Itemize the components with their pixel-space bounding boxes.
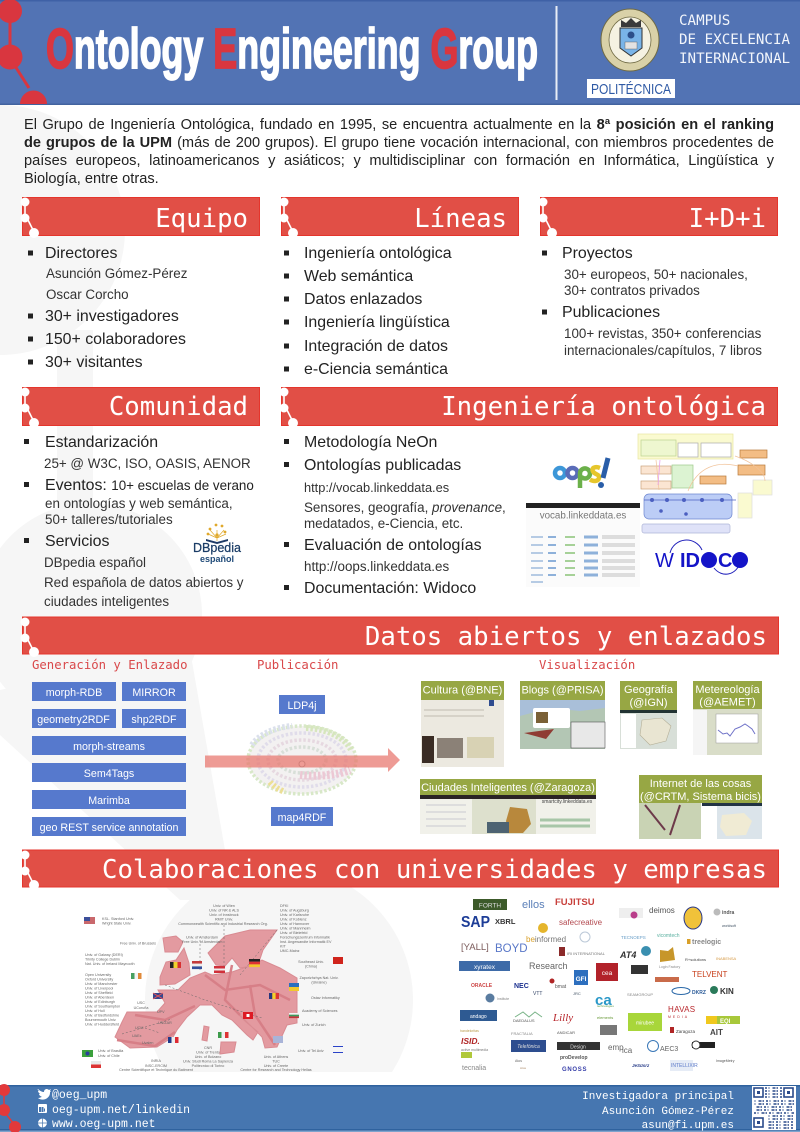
logos: partner companies: treelogic (692, 939, 721, 946)
list: research lines: Integración de datos (304, 338, 448, 355)
header band (0, 0, 800, 105)
labels: KSL. Stanford Univ. (102, 917, 134, 921)
logos: partner companies: Login Factory (659, 965, 680, 969)
logos: partner companies: R+solutions (685, 957, 706, 962)
campus text: CAMPUS (679, 13, 730, 29)
list: research lines: Ingeniería lingüística (304, 314, 450, 331)
labels: (China) (305, 964, 317, 968)
flags (82, 917, 343, 1068)
labels: Univ. of Zurich (302, 1023, 326, 1027)
labels: Univ. of Creete (264, 1064, 288, 1068)
icon: linkedin (38, 1104, 47, 1113)
heading: Ingeniería ontológica: Ingeniería ontológica (441, 392, 766, 422)
labels: DFKI (280, 904, 288, 908)
list: community: en ontologías y web semántica, (45, 496, 233, 511)
labels: Univ. of Trento (196, 1050, 220, 1054)
logos: partner companies: DAEDALUS (513, 1018, 535, 1023)
list: team: 30+ visitantes (45, 354, 143, 371)
logos: partner companies: ANDICAR (557, 1030, 575, 1035)
icon: DBpedia español logo: español (200, 554, 234, 564)
panel: Líneas (280, 198, 518, 378)
heading: Comunidad (20, 388, 260, 428)
logos: partner companies: mirubee (636, 1020, 654, 1026)
heading: Líneas: Líneas (414, 204, 507, 234)
arrow (205, 748, 400, 772)
logos: partner companies: beinformed (526, 935, 566, 944)
labels: UCM (135, 1026, 143, 1030)
labels: Forschungszentrum Informatik (280, 936, 330, 940)
tool boxes: generation: morph-RDB (46, 687, 102, 699)
logos: partner companies: Research (529, 961, 568, 971)
list: community: ciudades inteligentes (44, 594, 169, 609)
subheading: Visualización: Visualización (539, 658, 635, 672)
logos: partner companies: ImageMetry (716, 1059, 735, 1063)
contact: linkedin: oeg-upm.net/linkedin (52, 1104, 190, 1117)
list: community: 25+ @ W3C, ISO, OASIS, AENOR (44, 456, 251, 471)
tool box: LDP4j: LDP4j (287, 700, 317, 712)
contact: principal investigator: Asunción Gómez-Pérez (602, 1106, 734, 1118)
intro text block (24, 117, 774, 187)
labels: UNIZAR (158, 1021, 172, 1025)
icon: Widoco logo: C (718, 550, 732, 572)
heading: Comunidad: Comunidad (109, 392, 248, 422)
logos: partner companies: vicomtech (657, 933, 680, 939)
labels: Oxford University (85, 978, 113, 982)
labels (85, 904, 340, 1072)
logos: partner companies: xyratex (474, 964, 496, 971)
list: community: Estandarización (45, 434, 158, 451)
logos: partner companies: Lilly (552, 1012, 573, 1024)
labels: Free Univ. of Amsterdam (182, 940, 223, 944)
card: Cultura: Cultura (@BNE) (423, 684, 502, 696)
list: projects and publications: 100+ revistas, 350+ conferencias (564, 326, 762, 341)
labels: Univ. of Huddersfield (85, 1022, 119, 1026)
list: ontology engineering: Sensores, geografía, provenance, (304, 500, 506, 515)
intro text block: países europeos, latinoamericanos y asiáticos; y multidisciplinar con formación en Informática, Lingüística y (24, 153, 774, 169)
heading: I+D+i: I+D+i (689, 204, 766, 234)
labels: Open University (85, 973, 111, 977)
intro text block: de grupos de la UPM (más de 200 grupos). El grupo tiene vocación internacional, con miembros procedentes de (24, 135, 774, 151)
heading: Colaboraciones con universidades y empresas: Colaboraciones con universidades y empresas (102, 855, 767, 885)
map: Europe (82, 904, 343, 1072)
labels: Univ. of Karlsruhe (280, 913, 309, 917)
logos: partner companies: Design (570, 1044, 586, 1050)
logos: partner companies: Telefónica (517, 1044, 540, 1050)
list: team: Oscar Corcho (46, 287, 129, 302)
icon: footer molecule (0, 1084, 21, 1132)
logos: partner companies (459, 897, 740, 1073)
logos: partner companies: ISID. (461, 1036, 480, 1046)
logos: partner companies: FRACTALIA (511, 1031, 533, 1036)
list: research lines: e-Ciencia semántica (304, 361, 448, 378)
labels: Univ. of Galway (DERI) (85, 953, 123, 957)
tool box: map4RDF: map4RDF (278, 812, 327, 824)
logos: partner companies: tecnalia (462, 1065, 486, 1072)
logos: partner companies: cea (602, 970, 613, 977)
logos: partner companies: active multimedia (461, 1048, 488, 1052)
list: research lines: Ingeniería ontológica (304, 245, 452, 262)
logos: partner companies: BOYD (495, 943, 528, 955)
contact: principal investigator: asun@fi.upm.es (642, 1120, 734, 1132)
list: community: 50+ talleres/tutoriales (45, 512, 173, 527)
labels: Politecnico di Torino (192, 1064, 224, 1068)
labels: Free Univ. of Brussels (120, 942, 156, 946)
logos: partner companies: proDevelop (560, 1055, 588, 1061)
list: ontology engineering: http://vocab.linkeddata.es (304, 480, 449, 495)
labels: Univ. of Bielefeld (280, 931, 307, 935)
subheading: Generación y Enlazado: Generación y Enlazado (32, 658, 187, 672)
labels: UPV (157, 1010, 165, 1014)
card: Metereología: Metereología (695, 684, 760, 696)
logos: partner companies: bmat (555, 984, 567, 990)
list: community: Red española de datos abiertos y (44, 575, 244, 590)
labels: Centre Scientifique et Technique du Batiment (119, 1068, 193, 1072)
list: community (24, 434, 254, 609)
labels: Univ. of Athens (264, 1055, 288, 1059)
logos: partner companies: AIT (710, 1028, 723, 1037)
logos: partner companies: worldsoft (722, 924, 736, 928)
labels: Univ. of Amsterdam (186, 936, 218, 940)
chart: linked open data cloud (248, 726, 356, 794)
labels: CNR (204, 1046, 212, 1050)
card: Cultura (421, 681, 504, 767)
icon: DBpedia español logo: DBpedia (193, 540, 242, 555)
logos: partner companies: Atos (520, 1066, 527, 1070)
logos: partner companies: INABENSA (716, 956, 737, 961)
list: ontology engineering (284, 434, 506, 597)
logos: partner companies: Atos (515, 1059, 522, 1063)
logos: partner companies: ellos (522, 899, 545, 911)
icon: DBpedia español logo (193, 524, 242, 564)
icon: oops logo (555, 458, 608, 488)
panel: Datos abiertos y enlazados (20, 617, 778, 839)
list: ontology engineering: Documentación: Widoco (304, 580, 476, 597)
list: projects and publications: Publicaciones (562, 304, 660, 321)
labels: Commonwealth Scientific and Industrial Research Org. (178, 922, 268, 926)
logos: partner companies: GFI (576, 976, 587, 983)
tool boxes: generation (32, 682, 186, 836)
list: ontology engineering: Metodología NeOn (304, 434, 437, 451)
panel: Colaboraciones (20, 850, 778, 1073)
logos: partner companies: AEC3 (660, 1046, 678, 1053)
list: ontology engineering: http://oops.linkeddata.es (304, 559, 449, 574)
tool boxes: generation: geo REST service annotation (40, 822, 178, 834)
intro text block: Biología, entre otras. (24, 171, 159, 187)
heading: Datos abiertos y enlazados (20, 617, 778, 657)
contact: principal investigator (582, 1091, 734, 1132)
labels: Univ. Studi Roma La Sapienza (183, 1060, 234, 1064)
labels: Univ. of Liverpool (85, 986, 113, 990)
logos: partner companies: XBRL (495, 917, 516, 926)
logos: partner companies: VTT (533, 991, 542, 997)
card: Internet de las cosas: (@CRTM, Sistema bicis) (640, 791, 761, 803)
campus text: DE EXCELENCIA (679, 32, 790, 48)
contact: principal investigator: Investigadora principal (582, 1091, 734, 1103)
logos: partner companies: andago (470, 1014, 487, 1020)
logos: partner companies: KIN (720, 987, 734, 996)
list: projects and publications: Proyectos (562, 245, 633, 262)
logos: partner companies: elements (597, 1015, 613, 1020)
labels: Univ. of Southampton (85, 1004, 120, 1008)
logos: partner companies: IRI INTERNATIONAL (567, 951, 606, 956)
list: team: 150+ colaboradores (45, 331, 186, 348)
panel: Comunidad (20, 388, 260, 609)
tool boxes: generation: geometry2RDF (37, 714, 110, 726)
logos: partner companies: safecreative (559, 918, 603, 927)
list: team: 30+ investigadores (45, 308, 179, 325)
labels: Zaporizhzhya Nat. Univ. (299, 976, 339, 980)
list: community: Eventos: 10+ escuelas de verano (45, 477, 254, 494)
list: ontology engineering: medatados, e-Ciencia, etc. (304, 516, 463, 531)
icon: Widoco logo: ID (680, 550, 700, 572)
tool boxes: generation: Sem4Tags (84, 768, 134, 780)
list: ontology engineering: Evaluación de ontologías (304, 537, 482, 554)
heading: Equipo: Equipo (155, 204, 248, 234)
labels: Univ. of Mannheim (280, 926, 310, 930)
list: team (28, 245, 188, 371)
list: projects and publications (542, 245, 762, 358)
labels: UCoruña (134, 1006, 149, 1010)
tool box: map4RDF (271, 807, 333, 826)
logos: partner companies: TELVENT (692, 970, 728, 979)
campus text: INTERNACIONAL (679, 51, 790, 67)
list: team: Directores (45, 245, 117, 262)
labels: Univ. of Bolzano (195, 1055, 221, 1059)
heading: Líneas (280, 198, 518, 238)
diagram: NeOn methodology (638, 434, 772, 533)
logos: partner companies: indra (722, 910, 734, 916)
list: team: Asunción Gómez-Pérez (46, 266, 188, 281)
icon: red molecule (0, 0, 47, 104)
tool boxes: generation: Marimba (88, 795, 130, 807)
list: projects and publications: internacionales/capítulos, 7 libros (564, 343, 762, 358)
icon: twitter (38, 1089, 51, 1100)
labels: Univ. of Sheffield (85, 991, 113, 995)
logos: partner companies: Zaragoza (676, 1029, 696, 1034)
panel: Ingeniería ontológica (280, 388, 778, 597)
heading: Datos abiertos y enlazados: Datos abiertos y enlazados (365, 622, 767, 652)
heading: Colaboraciones con universidades y empresas (20, 850, 778, 890)
logos: partner companies: deimos (649, 906, 675, 915)
campus text (679, 13, 790, 67)
labels: Univ. of Edinburgh (85, 1000, 115, 1004)
list: projects and publications: 30+ contratos privados (564, 283, 700, 298)
logos: partner companies: emp (608, 1043, 624, 1052)
labels: Bournemouth Univ. (85, 1018, 116, 1022)
contact: website: www.oeg-upm.net (52, 1118, 156, 1131)
labels: Academy of Sciences (302, 1009, 338, 1013)
list: research lines: Web semántica (304, 268, 413, 285)
panel: I+D+i (538, 198, 778, 358)
subheading: Publicación: Publicación (257, 658, 338, 672)
heading: I+D+i (538, 198, 778, 238)
logos: partner companies: AT4 (619, 950, 636, 960)
logos: partner companies: MEDIA (668, 1015, 689, 1019)
labels: Inst. Angewandte Informatik EV (280, 940, 332, 944)
labels: Univ. of Bedfordshire (85, 1014, 119, 1018)
card: Internet de las cosas (639, 775, 762, 839)
footer (0, 1084, 800, 1132)
labels: Univ. of Innsbruck (209, 913, 239, 917)
labels: Univ. of Hull (85, 1009, 105, 1013)
tool boxes: generation: shp2RDF (131, 714, 177, 726)
logos: partner companies: FORTH (479, 902, 501, 910)
logos: partner companies: GNOSS (562, 1067, 587, 1073)
card: Geografía: Geografía (624, 684, 674, 696)
labels: Nat. Univ. of Ireland Maynooth (85, 962, 135, 966)
labels: Univ. of Chile (98, 1054, 120, 1058)
labels: Trinity College Dublin (85, 958, 120, 962)
icon: web globe (38, 1118, 47, 1128)
intro text block: El Grupo de Ingeniería Ontológica, fundado en 1995, se encuentra actualmente en la 8ª posición en el ranking (24, 117, 774, 133)
card: Metereología: (@AEMET) (699, 696, 756, 708)
logos: partner companies: EQI (720, 1019, 731, 1025)
logos: partner companies: ica (622, 1046, 633, 1055)
logos: partner companies: ORACLE (471, 983, 493, 989)
labels: RMIT Univ. (215, 918, 233, 922)
labels: Univ. of Augsburg (280, 908, 309, 912)
logos: partner companies: SEAMGROUP (627, 992, 653, 997)
labels: USC (137, 1001, 145, 1005)
labels: Univ. of Aberdeen (85, 996, 114, 1000)
logos: partner companies: NEC (514, 983, 529, 990)
logos: partner companies: HAVAS (668, 1005, 695, 1014)
card: Geografía: (@IGN) (629, 697, 668, 709)
labels: Southeast Univ. (298, 960, 324, 964)
logos: partner companies: FUJITSU (555, 897, 595, 908)
icon: Widoco logo: W (655, 550, 674, 572)
heading: Ingeniería ontológica (280, 388, 778, 428)
icon: UPM seal (601, 9, 659, 71)
logos: partner companies: ca (595, 992, 612, 1009)
heading: Equipo (20, 198, 260, 238)
card: Geografía (620, 681, 677, 749)
icon: Widoco logo (655, 540, 748, 574)
contact: twitter: @oeg_upm (52, 1089, 107, 1102)
screenshot: vocab.linkeddata.es (526, 503, 640, 587)
logos: partner companies: JeSüsrz (632, 1063, 650, 1068)
tool boxes: generation: MIRROR (132, 687, 176, 699)
icon: QR code (752, 1086, 796, 1130)
tool box: LDP4j (279, 695, 325, 714)
labels: Ostav Informatiky (311, 996, 340, 1000)
labels: Wright State Univ. (102, 922, 131, 926)
labels: UMC-Mainz (280, 949, 300, 953)
card: Blogs: Blogs (@PRISA) (521, 684, 604, 696)
card: Internet de las cosas: Internet de las cosas (650, 778, 752, 790)
logos: partner companies: handelcritas (460, 1029, 479, 1033)
title: Ontology Engineering Group (46, 17, 538, 81)
labels: Univ. of NR & ALS (209, 908, 239, 912)
logos: partner companies: JRC (573, 991, 581, 996)
labels: Centre for Research and Technology Hellas (240, 1068, 312, 1072)
list: research lines: Datos enlazados (304, 291, 422, 308)
list: community: Servicios (45, 533, 110, 550)
labels: Univ. of Wien (213, 904, 235, 908)
labels: Univ. of Manchester (85, 982, 118, 986)
labels: Univ. of Hannover (280, 922, 310, 926)
logos: partner companies: TECNOEPS (621, 935, 646, 940)
logos: partner companies: [YALL] (461, 942, 489, 953)
list: research lines (284, 245, 452, 378)
card: Blogs (520, 681, 605, 749)
labels: INRIA (151, 1059, 161, 1063)
labels: Univ. of Tel Aviv (298, 1049, 324, 1053)
card: Ciudades Inteligentes: Ciudades Inteligentes (@Zaragoza) (421, 782, 595, 794)
list: ontology engineering: Ontologías publicadas (304, 457, 461, 474)
labels: Uvalen (142, 1041, 153, 1045)
card: Ciudades Inteligentes: smartcity.linkeddata.es (542, 799, 593, 805)
screenshot: vocab.linkeddata.es: vocab.linkeddata.es (540, 510, 626, 522)
logos: partner companies: SAP (461, 914, 490, 931)
logos: partner companies: Institute (497, 997, 509, 1001)
labels: UAEx (132, 1034, 142, 1038)
labels: (Ukraine) (311, 980, 327, 984)
logos: partner companies: INTELLIXIR (671, 1063, 698, 1069)
labels: KIT (280, 944, 286, 948)
politécnica label: POLITÉCNICA (591, 81, 671, 98)
labels: Univ. of Brasilia (98, 1049, 124, 1053)
list: community: DBpedia español (44, 555, 146, 570)
labels: INSC-ERCIM (145, 1064, 167, 1068)
labels: TUC (272, 1060, 280, 1064)
panel: Equipo (20, 198, 260, 371)
list: projects and publications: 30+ europeos, 50+ nacionales, (564, 267, 748, 282)
card: Ciudades Inteligentes (420, 779, 596, 834)
labels: Univ. of Koblenz (280, 918, 307, 922)
tool boxes: generation: morph-streams (73, 741, 145, 753)
logos: partner companies: technologies (597, 1004, 614, 1008)
logos: partner companies: DKRZ (692, 990, 706, 996)
card: Metereología (693, 681, 762, 755)
